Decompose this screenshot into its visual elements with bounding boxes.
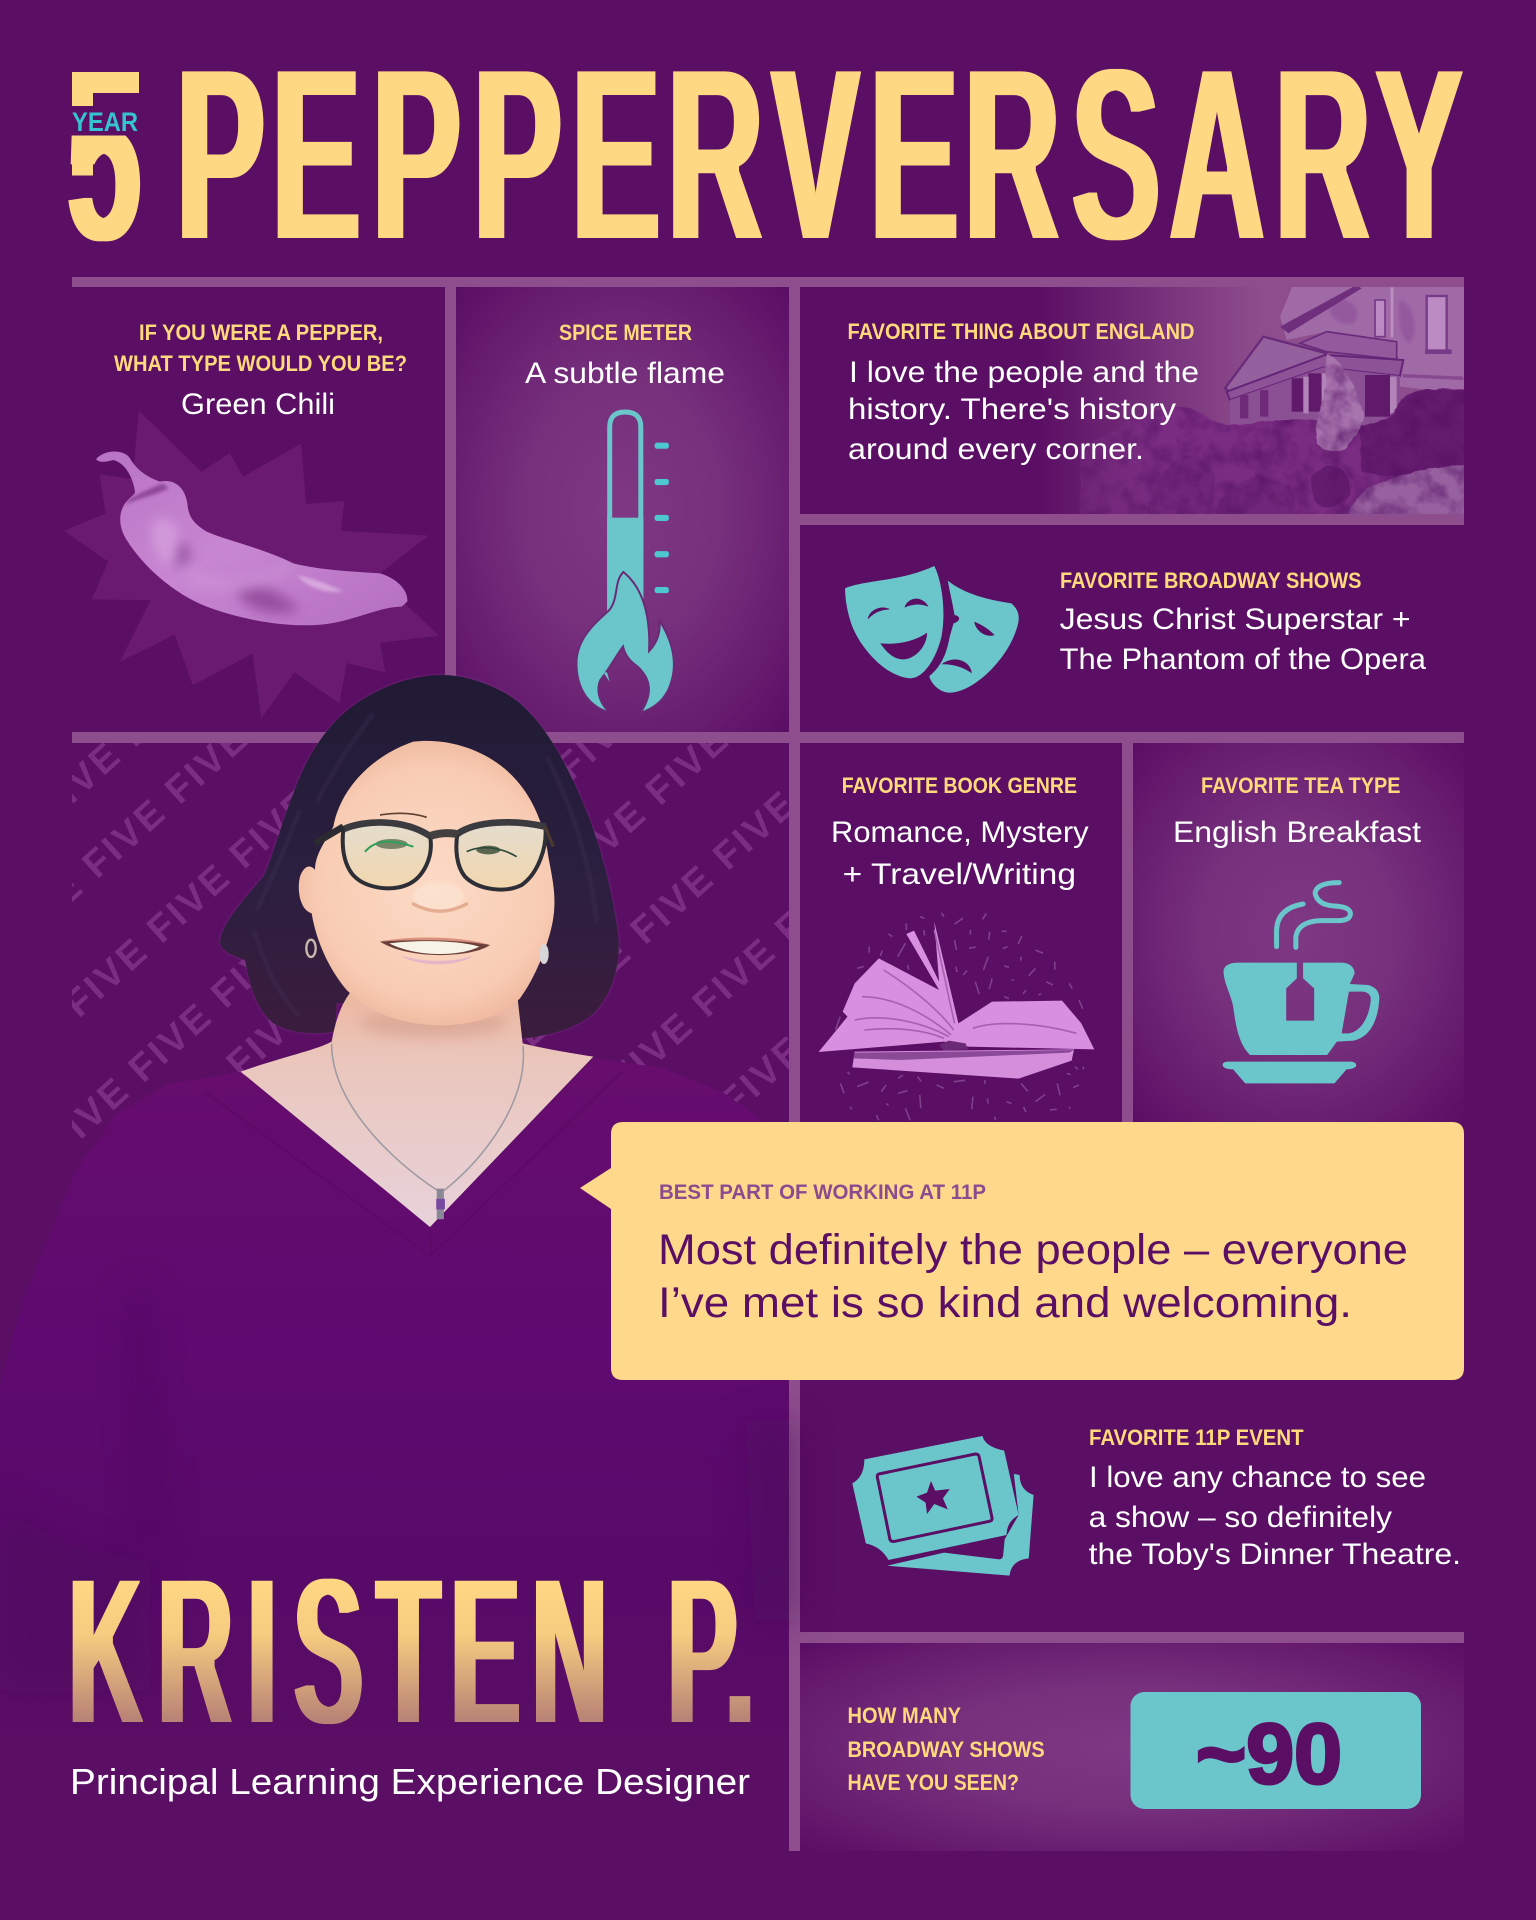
- panel: broadway shows count: [848, 1692, 1421, 1809]
- icon: starburst: [64, 411, 439, 718]
- name: kristen p.: KRISTEN P.: [69, 1532, 754, 1771]
- count value: ~90: [1196, 1707, 1342, 1802]
- spice answer: A subtle flame: [525, 357, 725, 390]
- spice heading: SPICE METER: [559, 320, 692, 345]
- panel: broadway count glow: [799, 1643, 1464, 1851]
- panel: spice meter glow: [456, 287, 789, 732]
- callout: best part of working at 11p: [580, 1122, 1464, 1380]
- icon: open book: [819, 913, 1094, 1120]
- callout: best part of working at 11p: BEST PART OF WORKING AT 11P: [659, 1181, 986, 1204]
- panel: broadway shows: [845, 566, 1426, 693]
- head, hair and neck: [220, 675, 619, 1227]
- count question: BROADWAY SHOWS: [848, 1737, 1045, 1762]
- icon: theatre masks: [845, 566, 1019, 693]
- panel: favorite 11p event: [852, 1425, 1461, 1576]
- grid lines: [72, 277, 1464, 1851]
- event answer: the Toby's Dinner Theatre.: [1089, 1538, 1461, 1571]
- england answer: around every corner.: [848, 433, 1144, 466]
- england answer: I love the people and the: [849, 356, 1199, 389]
- panel: spice meter: [525, 320, 725, 711]
- icon: tickets: [852, 1436, 1034, 1576]
- tea heading: FAVORITE TEA TYPE: [1201, 773, 1400, 798]
- england heading: FAVORITE THING ABOUT ENGLAND: [848, 319, 1194, 344]
- event heading: FAVORITE 11P EVENT: [1089, 1425, 1304, 1450]
- title: year badge 5: YEAR: [72, 107, 138, 137]
- necklace pendant: [332, 1044, 523, 1219]
- panel: england house photo: [1064, 287, 1464, 514]
- panel: tea glow: [1132, 743, 1464, 1122]
- broadway answer: [1060, 603, 1426, 676]
- book answer: + Travel/Writing: [843, 858, 1076, 891]
- event answer: a show – so definitely: [1089, 1501, 1392, 1534]
- england answer: history. There's history: [848, 393, 1176, 426]
- callout: best part of working at 11p: I’ve met is so kind and welcoming.: [658, 1279, 1352, 1327]
- glasses: [315, 822, 553, 890]
- count value box: [1130, 1692, 1421, 1809]
- event answer: [1089, 1461, 1461, 1571]
- count question: HAVE YOU SEEN?: [848, 1770, 1019, 1795]
- broadway answer: Jesus Christ Superstar +: [1060, 603, 1411, 636]
- event answer: I love any chance to see: [1089, 1461, 1426, 1494]
- panel: five pattern: FIVE FIVE FIVE FIVE FIVE FIVE FIVE FIVE FIVE FIVE: [293, 485, 1136, 1250]
- panel: favorite book genre: [819, 773, 1094, 1120]
- icon: tea cup: [1223, 883, 1379, 1083]
- pepper heading: IF YOU WERE A PEPPER,: [139, 320, 383, 345]
- panel: favorite thing about england: [848, 319, 1199, 466]
- pepper heading: WHAT TYPE WOULD YOU BE?: [114, 351, 407, 376]
- count question: [848, 1703, 1045, 1795]
- panel: favorite tea type: [1173, 773, 1422, 1083]
- icon: thermometer with flame: [577, 412, 673, 711]
- pepper heading: [114, 320, 407, 376]
- callout: best part of working at 11p: Most definitely the people – everyone: [658, 1226, 1408, 1274]
- title: pepperversary: PEPPERVERSARY: [176, 17, 1463, 294]
- pepper answer: Green Chili: [181, 388, 335, 421]
- panel: five pattern: FIVE FIVE FIVE FIVE FIVE FIVE FIVE FIVE FIVE FIVE: [219, 321, 1062, 1086]
- broadway answer: The Phantom of the Opera: [1060, 643, 1426, 676]
- england answer: [848, 356, 1199, 466]
- tea answer: English Breakfast: [1173, 816, 1422, 849]
- book answer: Romance, Mystery: [831, 816, 1089, 849]
- panel: pepper question: [64, 320, 439, 718]
- panel: five pattern: FIVE FIVE FIVE FIVE FIVE FIVE FIVE FIVE FIVE FIVE: [383, 656, 1226, 1421]
- broadway heading: FAVORITE BROADWAY SHOWS: [1060, 568, 1362, 593]
- job title: Principal Learning Experience Designer: [70, 1761, 750, 1802]
- panel: five pattern: [72, 743, 789, 1178]
- sweater: [0, 1058, 800, 1860]
- book answer: [831, 816, 1089, 891]
- title: year badge 5: 5: [67, 18, 141, 295]
- count question: HOW MANY: [848, 1703, 961, 1728]
- panel: five pattern: FIVE FIVE FIVE FIVE FIVE FIVE FIVE FIVE FIVE FIVE: [355, 558, 1198, 1323]
- portrait: kristen: [0, 675, 800, 1860]
- icon: chili pepper: [96, 452, 407, 625]
- panel: five pattern: FIVE FIVE FIVE FIVE FIVE FIVE FIVE FIVE FIVE FIVE: [308, 346, 1151, 1111]
- book heading: FAVORITE BOOK GENRE: [842, 773, 1077, 798]
